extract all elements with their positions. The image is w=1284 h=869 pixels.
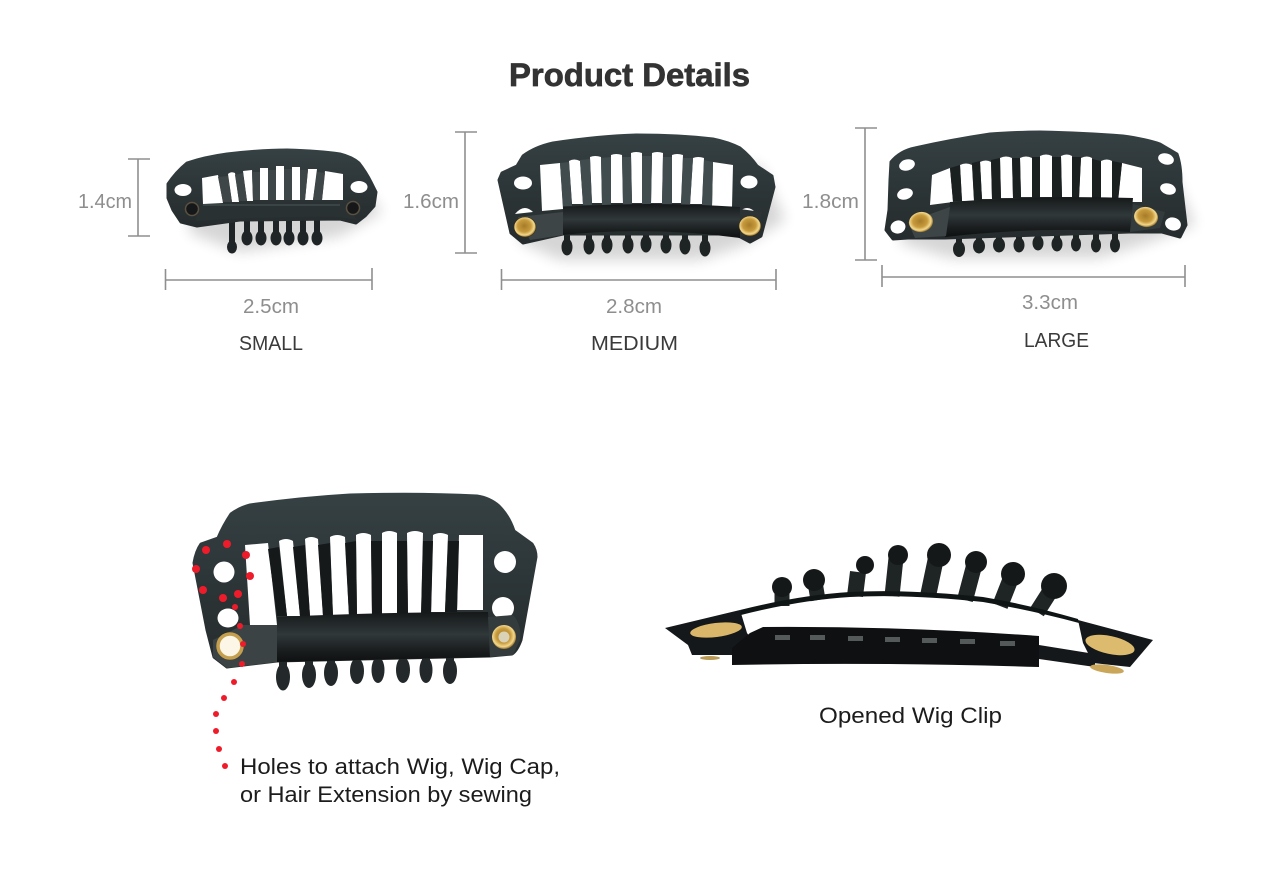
icon: small wig clip (168, 150, 382, 254)
callout text: Holes to attach Wig, Wig Cap, (240, 754, 560, 779)
small width dimension: 2.5cm (243, 296, 299, 318)
icon: large wig clip (886, 132, 1195, 258)
large height dimension: 1.8cm (802, 191, 859, 213)
callout: red dotted leader (192, 540, 254, 769)
icon: large front wig clip (194, 494, 536, 690)
panel: large clip (802, 128, 1195, 352)
medium height dimension (403, 132, 477, 253)
small height dimension: 1.4cm (78, 191, 132, 213)
panel: annotated clip (192, 494, 560, 807)
panel: small clip (78, 150, 382, 355)
small height dimension (78, 159, 150, 236)
icon: opened wig clip (665, 543, 1153, 675)
large label: LARGE (1024, 330, 1089, 352)
title: Product Details (509, 57, 750, 93)
callout text: or Hair Extension by sewing (240, 782, 532, 807)
small label: SMALL (239, 333, 303, 355)
opened clip caption: Opened Wig Clip (819, 703, 1002, 728)
medium width dimension (502, 269, 776, 318)
medium width dimension: 2.8cm (606, 296, 662, 318)
large height dimension (802, 128, 877, 260)
large width dimension: 3.3cm (1022, 292, 1078, 314)
small width dimension (166, 268, 372, 318)
callout text (240, 754, 560, 807)
icon: medium wig clip (499, 135, 785, 260)
large width dimension (882, 265, 1185, 314)
panel: medium clip (403, 132, 785, 355)
medium label: MEDIUM (591, 333, 678, 355)
medium height dimension: 1.6cm (403, 191, 459, 213)
panel: opened clip (665, 543, 1153, 728)
